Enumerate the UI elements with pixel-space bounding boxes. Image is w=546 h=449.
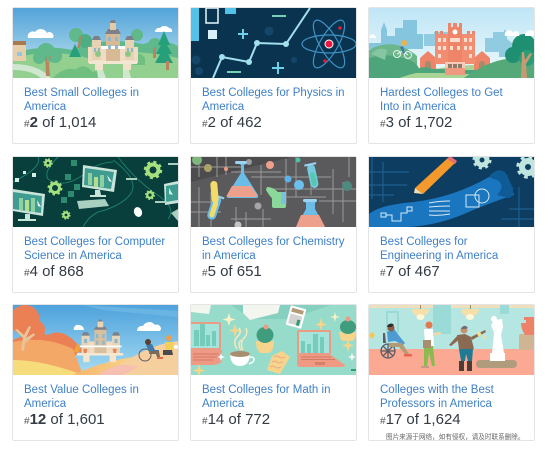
test tube: [204, 193, 224, 221]
wheelchair user: [139, 349, 151, 361]
title: [380, 87, 503, 113]
calculator: [286, 305, 306, 329]
title: America: [202, 101, 244, 113]
rank: #12 of 1,601: [24, 411, 105, 428]
title: [202, 236, 345, 262]
flask 2: [296, 200, 325, 227]
second person: [166, 335, 172, 341]
beaker: [272, 192, 286, 208]
title: Best Value Colleges in: [24, 384, 139, 396]
rank: #17 of 1,624: [380, 411, 461, 428]
title: [24, 384, 139, 410]
cactus 1: [256, 341, 274, 353]
illustration: laptops, coffee and cactus: [191, 305, 356, 375]
illustration: green campus with trees: [13, 8, 178, 78]
sparkles: [192, 312, 356, 377]
card: Colleges with the Best Professors in America: [369, 305, 534, 440]
title: [380, 236, 498, 262]
title: Best Colleges for: [380, 236, 468, 248]
rank: #2 of 1,014: [24, 114, 96, 131]
rank: #7 of 467: [380, 263, 440, 280]
card: Best Colleges for Math in America: [191, 305, 356, 440]
title: Engineering in America: [380, 250, 498, 262]
illustration: red brick college, cyclist and skyline: [369, 8, 534, 78]
title: [380, 384, 494, 410]
gears: [44, 159, 161, 219]
gears: [474, 152, 538, 177]
man: [460, 326, 468, 334]
title: Best Colleges for Chemistry: [202, 236, 345, 248]
card: Best Small Colleges in America: [13, 8, 178, 143]
illustration: atom and line graph: [191, 8, 356, 78]
wheelchair user: [381, 344, 395, 358]
illustration: computers and gears: [13, 157, 178, 227]
title: Science in America: [24, 250, 122, 262]
pencil: [415, 157, 456, 194]
title: [24, 87, 139, 113]
watermark text: 图片来源于网络，如有侵权，请及时联系删除。: [386, 434, 524, 441]
rank: #3 of 1,702: [380, 114, 452, 131]
card: Best Colleges for Computer Science in America: [13, 157, 178, 292]
title: Best Small Colleges in: [24, 87, 139, 99]
illustration: blueprint, pencil and gears: [369, 157, 534, 227]
card: Best Colleges for Chemistry in America: [191, 157, 356, 292]
dots: [192, 155, 202, 165]
statue: [476, 360, 517, 368]
rank: #14 of 772: [202, 411, 270, 428]
flask 1: [227, 162, 258, 198]
illustration: autumn campus with wheelchair user: [13, 305, 178, 375]
title: Professors in America: [380, 398, 492, 410]
title: Best Colleges for Computer: [24, 236, 165, 248]
paper: [267, 351, 290, 374]
building: [420, 51, 490, 70]
rank: #2 of 462: [202, 114, 262, 131]
title: Colleges with the Best: [380, 384, 494, 396]
title: Hardest Colleges to Get: [380, 87, 503, 99]
card: Best Colleges for Engineering in America: [369, 157, 534, 292]
tree: [512, 34, 536, 58]
illustration: museum visitors and statue: [369, 305, 534, 375]
monitor right: [164, 181, 178, 205]
monitor left: [13, 189, 45, 216]
title: America: [24, 398, 66, 410]
lamps: [412, 305, 479, 320]
mouse: [133, 206, 143, 218]
rank: #4 of 868: [24, 263, 84, 280]
card: Best Colleges for Physics in America: [191, 8, 356, 143]
title: [202, 384, 330, 410]
monitor mid: [82, 165, 117, 192]
woman: [426, 322, 432, 328]
laptop right: [297, 330, 331, 355]
title: Best Colleges for Physics in: [202, 87, 345, 99]
building: [88, 47, 138, 63]
laptop left: [189, 322, 221, 350]
illustration: flasks on chalkboard: [191, 157, 356, 227]
title: [202, 87, 345, 113]
title: [24, 236, 165, 262]
building and autumn trees: [74, 319, 123, 362]
title: Best Colleges for Math in: [202, 384, 330, 396]
title: America: [202, 398, 244, 410]
card: Best Value Colleges in America: [13, 305, 178, 440]
cyclist: [394, 50, 412, 58]
coffee: [230, 353, 250, 366]
card: Hardest Colleges to Get Into in America: [369, 8, 534, 143]
cactus 2: [339, 332, 356, 341]
title: in America: [202, 250, 256, 262]
pedestal and vase: [519, 334, 534, 350]
rank: #5 of 651: [202, 263, 262, 280]
title: Into in America: [380, 101, 456, 113]
title: America: [24, 101, 66, 113]
